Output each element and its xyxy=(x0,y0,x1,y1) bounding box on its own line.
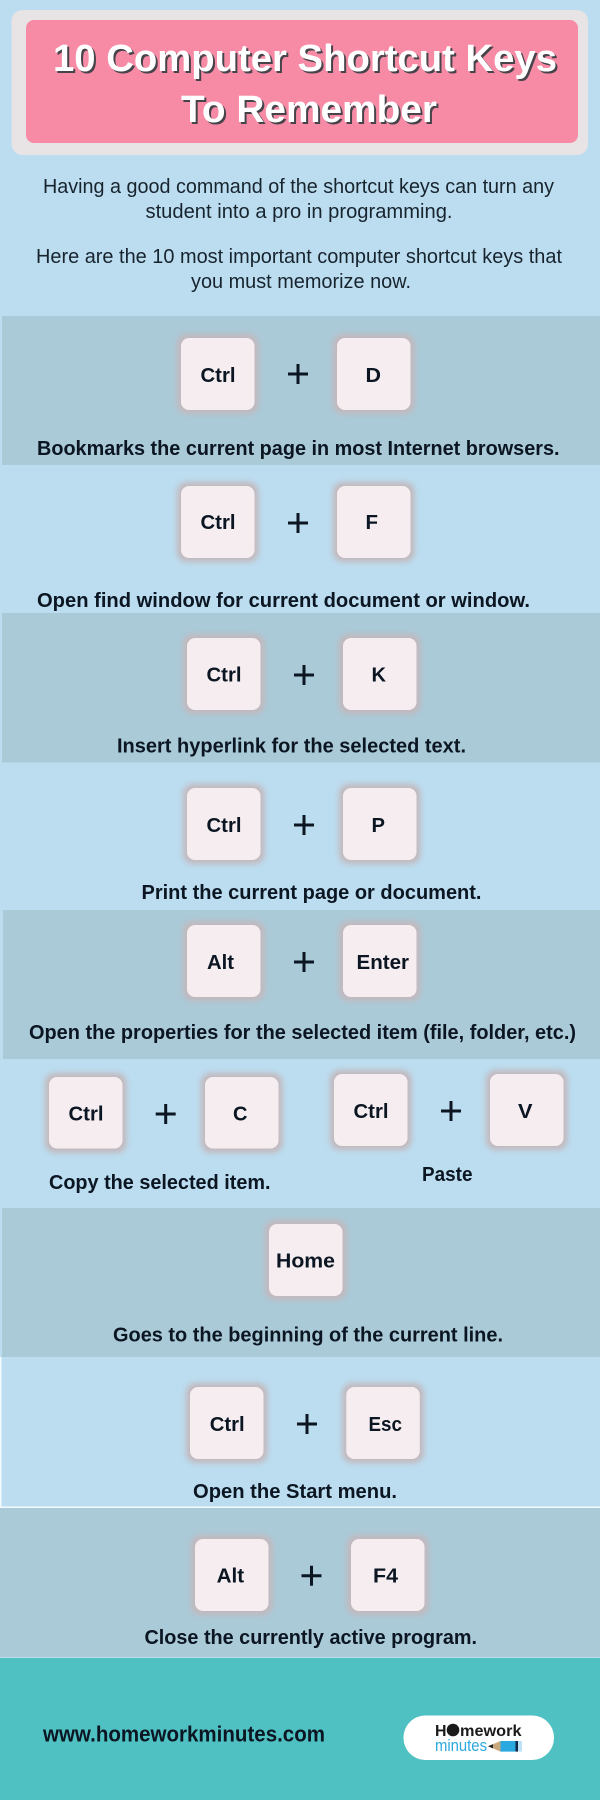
panel: Ctrl + P xyxy=(0,762,600,910)
key: P xyxy=(339,784,420,864)
panel: Ctrl + D xyxy=(2,316,600,465)
footer panel xyxy=(0,1658,600,1800)
title: 10 Computer Shortcut Keys xyxy=(53,38,557,80)
key: F4: F4 xyxy=(373,1564,399,1588)
description: Print the current page or document. xyxy=(142,882,482,904)
key: Ctrl xyxy=(177,334,258,414)
key: Ctrl xyxy=(183,634,264,714)
icon: plus xyxy=(156,1104,176,1124)
logo wordmark: homework: H xyxy=(435,1723,446,1740)
description: Open the properties for the selected item (file, folder, etc.) xyxy=(29,1022,576,1044)
key: Ctrl: Ctrl xyxy=(206,814,242,837)
description: Close the currently active program. xyxy=(144,1627,477,1649)
key: Home xyxy=(265,1220,346,1300)
key: C: C xyxy=(233,1102,248,1126)
key: Esc: Esc xyxy=(368,1413,402,1436)
key: V: V xyxy=(518,1100,533,1123)
key: Ctrl xyxy=(183,784,264,864)
panel: Ctrl + K xyxy=(2,613,600,762)
key: V xyxy=(486,1070,568,1150)
key: Ctrl xyxy=(186,1383,268,1463)
key: Ctrl xyxy=(330,1070,412,1150)
key: Ctrl: Ctrl xyxy=(200,364,236,387)
panel: Home xyxy=(2,1208,600,1357)
logo wordmark: minutes: minutes xyxy=(435,1736,487,1755)
title panel xyxy=(12,10,588,155)
panel: Ctrl + Esc xyxy=(0,1357,600,1508)
key: Enter: Enter xyxy=(356,951,409,974)
title xyxy=(53,38,557,131)
key: K xyxy=(339,634,420,714)
key: Alt xyxy=(183,921,264,1001)
description: Insert hyperlink for the selected text. xyxy=(117,736,466,758)
key: Ctrl: Ctrl xyxy=(206,664,242,686)
key: Ctrl: Ctrl xyxy=(354,1100,388,1123)
description: paste: Paste xyxy=(422,1164,472,1186)
panel: Alt + Enter xyxy=(3,910,600,1059)
panel: Ctrl + F xyxy=(0,465,600,613)
icon: plus xyxy=(297,1414,317,1434)
key: C xyxy=(201,1073,282,1153)
key: Alt: Alt xyxy=(207,951,234,974)
intro text xyxy=(36,176,562,293)
key: K: K xyxy=(372,664,386,686)
intro text: student into a pro in programming. xyxy=(146,201,452,223)
key: F xyxy=(333,482,414,562)
description: Open find window for current document or window. xyxy=(37,590,530,612)
logo xyxy=(404,1716,554,1760)
description: Goes to the beginning of the current line. xyxy=(113,1324,503,1346)
key: Ctrl xyxy=(45,1073,126,1153)
key: Ctrl: Ctrl xyxy=(200,511,236,534)
icon: plus xyxy=(288,364,308,384)
key: Esc xyxy=(342,1383,424,1463)
description: Bookmarks the current page in most Internet browsers. xyxy=(37,438,560,460)
key: Ctrl xyxy=(177,482,258,562)
icon: plus xyxy=(294,815,314,835)
key: F: F xyxy=(366,511,378,534)
icon: plus xyxy=(294,952,314,972)
key: Enter xyxy=(339,921,420,1001)
intro text: you must memorize now. xyxy=(191,271,411,293)
panel: Ctrl + C and Ctrl + V xyxy=(2,1059,600,1208)
key: Ctrl: Ctrl xyxy=(210,1413,245,1436)
icon: pencil xyxy=(488,1741,522,1752)
icon: plus xyxy=(302,1566,322,1586)
description: copy: Copy the selected item. xyxy=(49,1172,270,1194)
logo wordmark: homework xyxy=(435,1723,522,1740)
icon: plus xyxy=(441,1101,461,1121)
logo wordmark: homework: mework xyxy=(460,1723,522,1740)
key: Alt xyxy=(191,1535,272,1615)
key: D xyxy=(333,334,414,414)
key: D: D xyxy=(366,364,381,387)
icon: plus xyxy=(288,513,308,533)
title: To Remember xyxy=(181,89,437,131)
description: Open the Start menu. xyxy=(193,1481,397,1503)
key: Alt: Alt xyxy=(217,1564,244,1588)
icon: plus xyxy=(294,665,314,685)
website url: www.homeworkminutes.com xyxy=(42,1722,325,1746)
intro text: Here are the 10 most important computer shortcut keys that xyxy=(36,246,562,268)
key: Ctrl: Ctrl xyxy=(68,1102,104,1126)
key: P: P xyxy=(372,814,385,837)
intro text: Having a good command of the shortcut keys can turn any xyxy=(43,176,554,198)
panel: Alt + F4 xyxy=(0,1508,600,1657)
key: F4 xyxy=(347,1535,428,1615)
key: Home: Home xyxy=(276,1250,335,1272)
